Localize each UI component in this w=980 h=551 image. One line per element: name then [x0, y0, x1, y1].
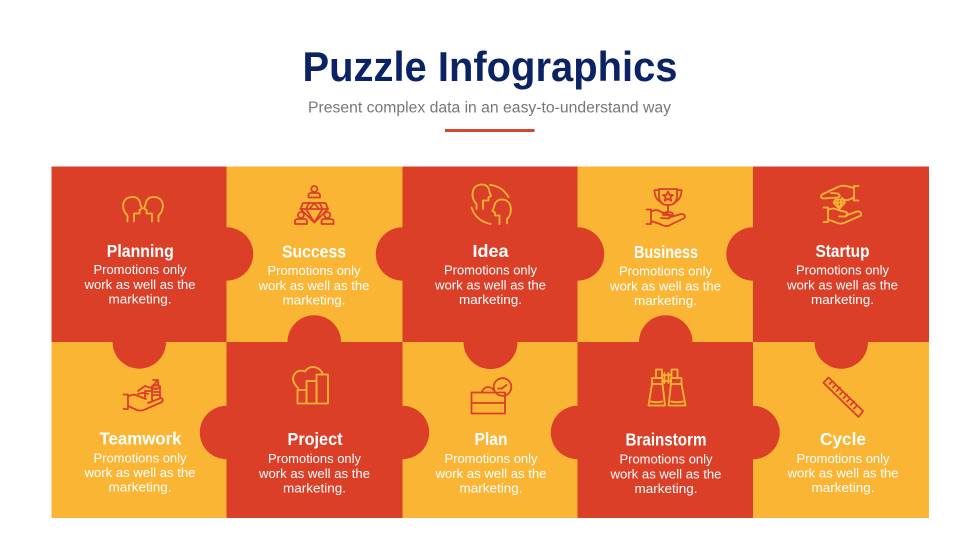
body text	[786, 262, 898, 307]
body text: work as well as the	[609, 466, 722, 482]
panel: Cycle	[753, 342, 929, 518]
panel: Planning	[52, 166, 253, 369]
body text: marketing.	[811, 292, 874, 307]
heading: Planning	[107, 241, 174, 261]
body text: marketing.	[459, 292, 522, 307]
body text: work as well as the	[257, 278, 370, 293]
body text: marketing.	[108, 480, 172, 494]
panel: Success	[226, 166, 402, 342]
heading: Project	[288, 429, 343, 449]
subtitle: Present complex data in an easy-to-understand way	[308, 100, 671, 116]
body text: Promotions only	[620, 452, 713, 466]
body text: marketing.	[108, 292, 172, 306]
body text	[258, 451, 370, 496]
body text: work as well as the	[609, 278, 721, 294]
body text: marketing.	[812, 480, 874, 495]
body text	[83, 450, 196, 494]
body text	[434, 451, 546, 496]
body text: work as well as the	[434, 278, 546, 292]
body text: work as well as the	[83, 465, 196, 480]
body text: work as well as the	[786, 278, 898, 292]
heading: Business	[634, 242, 698, 262]
body text: work as well as the	[434, 466, 546, 481]
body text: marketing.	[634, 293, 697, 308]
heading: Startup	[816, 241, 870, 261]
heading: Teamwork	[100, 428, 182, 448]
body text: marketing.	[634, 481, 698, 496]
body text: marketing.	[460, 480, 522, 496]
body text: marketing.	[283, 480, 346, 496]
body text: Promotions only	[268, 451, 361, 466]
body text	[609, 264, 721, 308]
heading: Brainstorm	[626, 430, 706, 450]
heading: Plan	[474, 429, 508, 449]
title: Puzzle Infographics	[302, 43, 678, 90]
body text: Promotions only	[94, 450, 187, 466]
body text: Promotions only	[796, 262, 889, 278]
body text: marketing.	[282, 292, 346, 308]
panel: Business	[578, 166, 753, 342]
body text	[786, 451, 898, 495]
body text: Promotions only	[444, 262, 537, 278]
body text: Promotions only	[796, 451, 890, 466]
icon: two heads	[123, 197, 163, 222]
body text: work as well as the	[83, 277, 196, 292]
body text: work as well as the	[258, 466, 370, 481]
icon: hand with coins and growth arrow	[124, 380, 163, 411]
icon: cloud with bars	[293, 367, 328, 404]
panel: Plan	[402, 342, 578, 518]
body text: Promotions only	[268, 263, 361, 278]
panel: Brainstorm	[551, 315, 780, 518]
body text	[609, 452, 722, 496]
heading: Success	[282, 242, 346, 262]
panel: Project	[200, 315, 429, 518]
icon: people around a diamond	[295, 186, 334, 224]
panel: Idea	[376, 166, 604, 369]
icon: ruler	[824, 378, 863, 417]
accent rule	[445, 129, 534, 132]
icon: hands with diamond	[821, 186, 861, 224]
body text	[83, 262, 196, 306]
body text	[434, 262, 546, 307]
icon: heads in a cycle	[472, 184, 511, 224]
heading: Cycle	[820, 429, 866, 449]
body text: Promotions only	[94, 262, 187, 277]
body text	[257, 263, 370, 308]
icon: binoculars	[648, 370, 686, 406]
panel: Teamwork	[52, 342, 226, 518]
icon: box with clock	[472, 378, 511, 414]
heading: Idea	[472, 241, 509, 261]
icon: hand holding trophy	[646, 189, 685, 226]
panel: Startup	[726, 166, 929, 369]
body text: Promotions only	[444, 451, 538, 466]
body text: work as well as the	[786, 466, 898, 480]
body text: Promotions only	[619, 264, 712, 278]
